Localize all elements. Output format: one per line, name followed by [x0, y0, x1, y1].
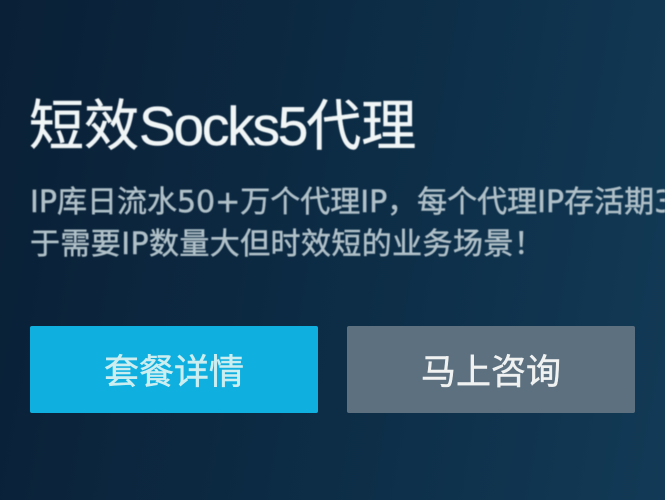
title: 短效Socks5代理	[29, 95, 416, 157]
description text: IP库日流水50+万个代理IP，每个代理IP存活期3	[30, 185, 665, 220]
description text	[30, 185, 665, 262]
button: consult now	[347, 326, 635, 413]
button: consult now: 马上咨询	[421, 353, 561, 392]
button: package details	[30, 326, 318, 413]
button: package details: 套餐详情	[104, 353, 244, 392]
description text: 于需要IP数量大但时效短的业务场景！	[30, 227, 544, 262]
